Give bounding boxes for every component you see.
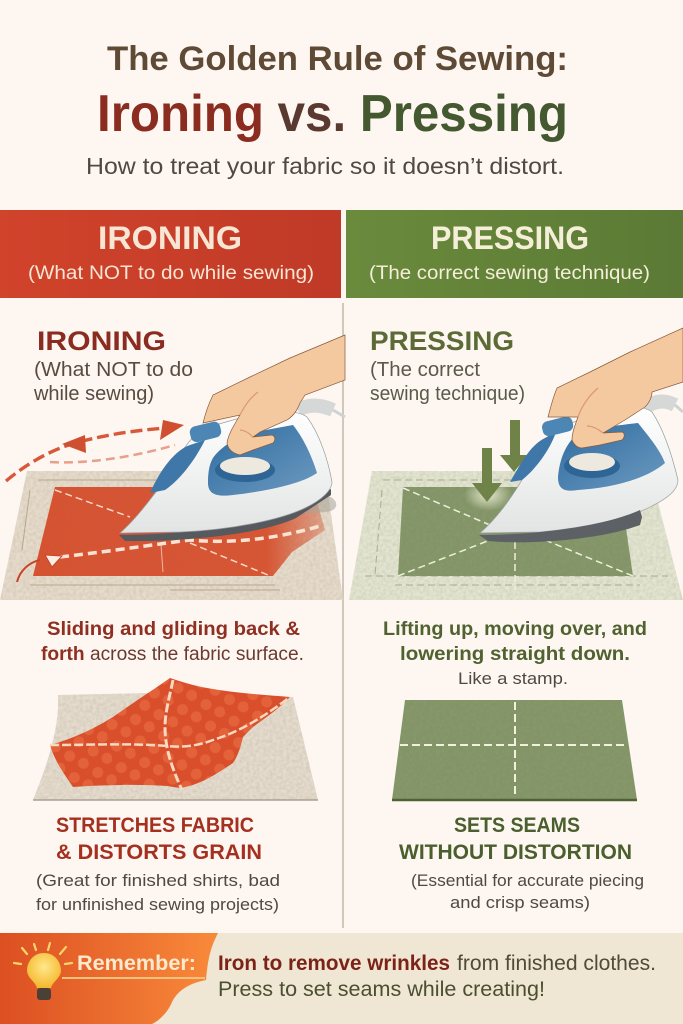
icon: light bulb	[14, 943, 72, 1000]
text: lifting description: Like a stamp.	[458, 669, 568, 688]
title: Ironing vs. Pressing	[97, 85, 568, 143]
banner text	[218, 952, 656, 1001]
text: sets seams	[399, 814, 644, 912]
banner text: from finished clothes.	[457, 952, 656, 975]
ironing heading: (What NOT to do	[34, 359, 193, 381]
header: ironing: IRONING	[98, 220, 242, 256]
panel: pressing	[349, 326, 683, 912]
text: stretches fabric: STRETCHES FABRIC	[56, 814, 254, 837]
banner text: Press to set seams while creating!	[218, 978, 545, 1001]
arrow: back and forth motion	[6, 420, 184, 481]
text: stretches fabric: for unfinished sewing projects)	[36, 895, 279, 914]
text: sets seams: WITHOUT DISTORTION	[399, 841, 632, 864]
header: pressing	[346, 210, 683, 298]
title	[97, 40, 568, 143]
text: stretches fabric: (Great for finished shirts, bad	[36, 871, 280, 890]
illustration: distorted fabric	[33, 678, 318, 800]
pressing heading: (The correct	[370, 359, 480, 381]
illustration: fabric being ironed	[0, 471, 343, 600]
text: lifting description: lowering straight down.	[400, 644, 630, 665]
text: stretches fabric: & DISTORTS GRAIN	[56, 841, 262, 864]
title: The Golden Rule of Sewing:	[107, 40, 568, 78]
header: ironing	[0, 210, 341, 298]
pressing heading	[370, 326, 525, 405]
pressing heading: sewing technique)	[370, 383, 525, 405]
illustration: fabric being pressed	[349, 471, 683, 600]
header: pressing: PRESSING	[431, 220, 589, 256]
pressing heading: PRESSING	[370, 326, 514, 356]
text: lifting description: Lifting up, moving over, and	[383, 619, 647, 640]
text: sliding description	[41, 619, 304, 665]
text: sliding description: forth across the fabric surface.	[41, 644, 304, 665]
text: sets seams: and crisp seams)	[450, 893, 590, 912]
text: sliding description: Sliding and gliding back &	[47, 619, 300, 640]
ironing heading	[33, 326, 193, 405]
icon: iron held by hand	[119, 335, 345, 541]
arrows: straight down	[464, 420, 528, 511]
text: sets seams: (Essential for accurate piecing	[411, 871, 644, 890]
text: lifting description	[383, 619, 647, 688]
illustration: flat green fabric	[392, 700, 637, 800]
header: ironing: (What NOT to do while sewing)	[28, 263, 314, 284]
text: stretches fabric	[36, 814, 280, 914]
subtitle: How to treat your fabric so it doesn’t distort.	[86, 153, 564, 179]
header: pressing: (The correct sewing technique)	[369, 263, 650, 284]
ironing heading: while sewing)	[33, 383, 154, 405]
remember label: Remember:	[77, 952, 196, 975]
icon: iron held by hand	[479, 328, 683, 542]
panel: ironing	[0, 326, 345, 914]
banner: remember	[0, 933, 683, 1024]
ironing heading: IRONING	[37, 326, 166, 356]
text: sets seams: SETS SEAMS	[454, 814, 580, 837]
banner text: Iron to remove wrinkles	[218, 952, 450, 975]
